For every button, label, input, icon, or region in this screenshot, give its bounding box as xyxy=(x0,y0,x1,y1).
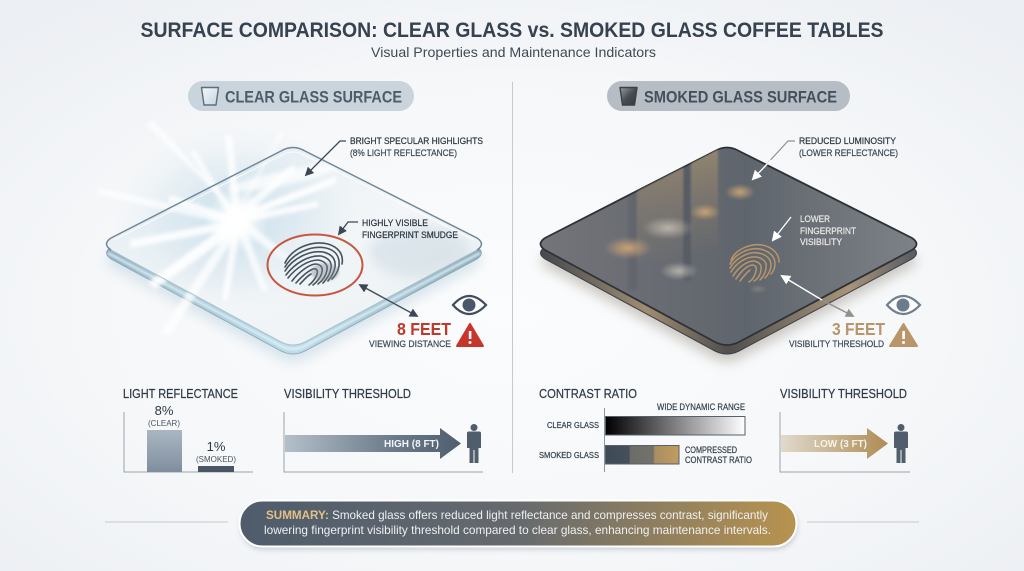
summary banner: lowering fingerprint visibility threshold compared to clear glass, enhancing maintenance intervals. xyxy=(264,523,771,537)
bar chart: light reflectance: LIGHT REFLECTANCE xyxy=(123,387,238,401)
summary lines xyxy=(105,522,919,523)
specular rays xyxy=(98,120,337,335)
bar: smoked glass xyxy=(539,446,679,464)
double arrow: viewing distance xyxy=(360,285,417,316)
callout: lower fingerprint visibility: FINGERPRINT xyxy=(800,226,856,237)
callout: highly visible fingerprint smudge: FINGERPRINT SMUDGE xyxy=(362,230,458,241)
callout: bright specular highlights: (8% LIGHT REFLECTANCE) xyxy=(350,148,457,159)
fingerprint: low visibility xyxy=(730,245,779,282)
icon: clear glass xyxy=(202,88,218,105)
callout: bright specular highlights: BRIGHT SPECULAR HIGHLIGHTS xyxy=(350,136,483,147)
heading pill: smoked glass surface xyxy=(607,81,850,111)
title: SURFACE COMPARISON: CLEAR GLASS vs. SMOKED GLASS COFFEE TABLES xyxy=(140,19,884,42)
bar: smoked 1%: (SMOKED) xyxy=(196,454,236,464)
bar chart: light reflectance xyxy=(123,387,253,472)
callout: reduced luminosity: (LOWER REFLECTANCE) xyxy=(799,148,898,159)
center divider xyxy=(512,82,513,473)
icon: person xyxy=(894,424,908,463)
chart: visibility threshold high: VISIBILITY THRESHOLD xyxy=(284,387,411,401)
summary banner: SUMMARY: Smoked glass offers reduced light reflectance and compresses contrast, significantly xyxy=(266,508,768,522)
callout: highly visible fingerprint smudge: HIGHLY VISIBLE xyxy=(362,218,428,229)
icon: smoked glass xyxy=(620,88,637,105)
chart: visibility threshold low: VISIBILITY THRESHOLD xyxy=(780,387,907,401)
panel: clear glass surface xyxy=(98,81,486,362)
callout: 8 feet viewing distance: 8 FEET xyxy=(397,319,451,339)
bar: clear 8%: (CLEAR) xyxy=(148,418,180,428)
bar: clear glass xyxy=(547,416,745,435)
chart: contrast ratio: CONTRAST RATIO xyxy=(539,387,637,401)
icon: person xyxy=(467,424,481,463)
heading pill: smoked glass surface: SMOKED GLASS SURFACE xyxy=(644,88,837,106)
arrow: high 8 ft xyxy=(285,428,461,459)
callout: 8 feet viewing distance: VIEWING DISTANCE xyxy=(369,339,451,350)
arrow: low 3 ft: LOW (3 FT) xyxy=(814,439,867,450)
chart: contrast ratio xyxy=(539,387,752,472)
callout: 3 feet visibility threshold xyxy=(789,319,885,350)
heading pill: clear glass surface xyxy=(188,81,414,111)
chart: contrast ratio: COMPRESSED xyxy=(685,445,737,455)
smoked glass table xyxy=(540,145,916,362)
bar: smoked glass: SMOKED GLASS xyxy=(539,450,599,460)
callout: 3 feet visibility threshold: VISIBILITY THRESHOLD xyxy=(789,339,884,350)
chart: contrast ratio: CONTRAST RATIO xyxy=(685,455,752,465)
callout: 3 feet visibility threshold: 3 FEET xyxy=(832,319,885,339)
heading pill: clear glass surface: CLEAR GLASS SURFACE xyxy=(225,88,402,106)
callout: lower fingerprint visibility xyxy=(773,214,856,248)
callout: highly visible fingerprint smudge xyxy=(339,218,458,241)
bar: clear glass: CLEAR GLASS xyxy=(547,420,599,430)
callout: reduced luminosity: REDUCED LUMINOSITY xyxy=(799,136,897,147)
chart: contrast ratio: WIDE DYNAMIC RANGE xyxy=(657,402,745,412)
panel: smoked glass surface xyxy=(540,81,920,362)
subtitle: Visual Properties and Maintenance Indicators xyxy=(371,44,656,60)
clear glass table xyxy=(106,146,482,366)
callout: bright specular highlights xyxy=(306,136,483,175)
chart: visibility threshold high xyxy=(284,387,483,472)
bar: clear 8% xyxy=(147,403,182,472)
reflections on smoked glass xyxy=(604,145,767,293)
arrow: high 8 ft: HIGH (8 FT) xyxy=(384,439,439,450)
fingerprint in red circle xyxy=(268,234,362,296)
callout: reduced luminosity xyxy=(753,136,898,179)
bar: smoked 1%: 1% xyxy=(207,439,226,454)
callout: lower fingerprint visibility: VISIBILITY xyxy=(800,237,843,248)
icon: tan warning triangle xyxy=(890,324,917,346)
double arrow: 3 feet threshold xyxy=(782,276,853,316)
icon: red warning triangle xyxy=(457,324,483,346)
bar: clear 8%: 8% xyxy=(155,403,174,418)
callout: 8 feet viewing distance xyxy=(369,319,451,350)
icon: eye xyxy=(887,296,920,314)
icon: eye xyxy=(453,296,486,314)
summary banner xyxy=(240,500,797,549)
callout: lower fingerprint visibility: LOWER xyxy=(800,214,830,225)
bar: smoked 1% xyxy=(196,439,236,472)
chart: visibility threshold low xyxy=(780,387,910,472)
